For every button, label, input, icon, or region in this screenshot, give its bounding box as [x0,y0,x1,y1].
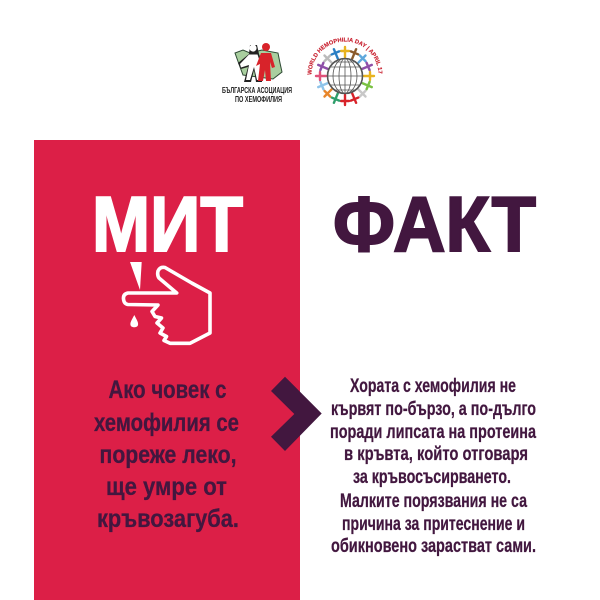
text: fact statement: Хората с хемофилия не [350,376,516,397]
text: myth statement: хемофилия се [94,409,239,437]
text: fact statement [330,376,536,557]
text: fact statement: поради липсата на протеина [330,422,536,443]
logo: World Hemophilia Day [307,38,382,106]
text: fact statement: за кръвосъсирването. [353,467,511,488]
logo text [222,86,292,104]
ring of coloured figures [316,47,374,105]
text: fact statement: обикновено зарастват сами. [331,536,536,557]
text: fact statement: Малките порязвания не са [340,491,527,512]
text: fact statement: кървят по-бързо, а по-дълго [331,399,536,420]
logo arc text: WORLD HEMOPHILIA DAY | APRIL 17 [307,38,382,75]
text: myth statement: Ако човек с [108,376,227,404]
text: fact statement: причина за притеснение и [342,514,525,535]
icon: globe [328,58,362,94]
logo text: ПО ХЕМОФИЛИЯ [235,95,282,104]
heading: fact: ФАКТ [333,180,536,268]
text: myth statement [94,376,239,533]
logo: Bulgarian hemophilia association [222,43,292,104]
logo text: БЪЛГАРСКА АСОЦИАЦИЯ [222,86,292,95]
heading: myth: МИТ [92,180,243,268]
arrow: chevron [271,377,322,451]
text: myth statement: ще умре от [106,473,227,501]
icon: cut finger [123,262,210,343]
text: myth statement: пореже леко, [100,441,236,469]
icon: map with two figures [235,43,282,82]
text: myth statement: кръвозагуба. [97,505,239,533]
panel: myth [34,140,300,600]
text: fact statement: в кръвта, който отговаря [344,444,528,465]
